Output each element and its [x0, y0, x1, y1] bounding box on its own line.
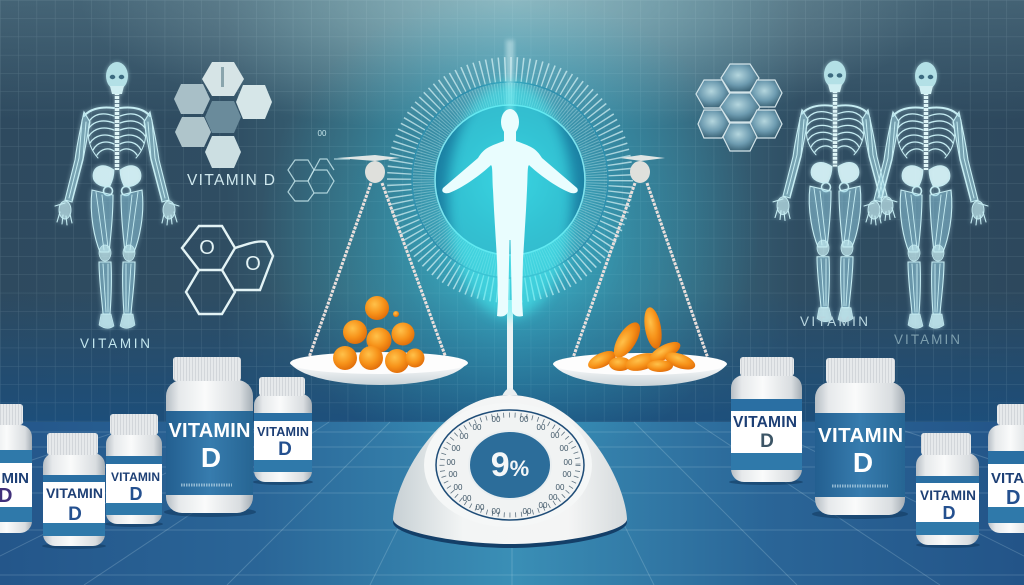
- background wall: [0, 0, 1024, 425]
- dial tick numbers: 00: [476, 503, 485, 512]
- vertical light beam and scale pole: [502, 40, 518, 396]
- small molecule diagram: [288, 129, 350, 201]
- right pan with softgel capsules: [553, 306, 727, 386]
- bottle: far left, cropped: [0, 404, 32, 533]
- orange capsules: [585, 306, 697, 374]
- dial tick numbers: 00: [460, 432, 469, 441]
- dial tick numbers: 00: [551, 431, 560, 440]
- dial tick numbers: 00: [523, 507, 532, 516]
- dial tick numbers: 00: [463, 494, 472, 503]
- dial tick numbers: 00: [520, 415, 529, 424]
- bottle: large left: D: [201, 442, 221, 473]
- bottle: small middle left: [105, 414, 163, 527]
- orange balls: [333, 296, 424, 373]
- dial tick numbers: 00: [549, 493, 558, 502]
- dial tick numbers: 00: [556, 483, 565, 492]
- bottle: back left: D: [278, 439, 292, 460]
- bottle: small front left: [42, 433, 106, 549]
- label: vitamin D: VITAMIN D: [187, 172, 275, 189]
- glowing human figure: [442, 82, 578, 318]
- percentage value: 9%: [491, 446, 529, 484]
- label text: VITAMIN: [168, 420, 250, 442]
- dial tick numbers: [447, 415, 573, 516]
- dial tick numbers: 00: [539, 501, 548, 510]
- bottle: back left: [253, 377, 313, 485]
- bottle: back right: D: [760, 431, 774, 452]
- label text: MIN: [2, 470, 29, 487]
- right scale arm: [568, 155, 712, 372]
- label text: VITAMIN: [818, 424, 903, 447]
- dial tick numbers: 00: [447, 458, 456, 467]
- dial tick numbers: 00: [492, 507, 501, 516]
- dial tick numbers: 00: [560, 444, 569, 453]
- left chains: [306, 183, 450, 369]
- dial tick numbers: 00: [473, 423, 482, 432]
- inner disc: [435, 105, 585, 255]
- dial tick numbers: 00: [563, 470, 572, 479]
- hexagon cluster: right: [696, 64, 782, 151]
- label text: VITAMIN: [46, 485, 103, 501]
- small molecule diagram: 00: [318, 129, 327, 138]
- dial tick numbers: 00: [537, 423, 546, 432]
- dial tick numbers: 00: [492, 415, 501, 424]
- skeletons: right pair: [773, 61, 988, 347]
- dial centre readout: [469, 431, 551, 499]
- radial sunburst ring: [400, 70, 620, 290]
- label text: VITAMIN: [257, 425, 309, 439]
- dial tick numbers: 00: [452, 444, 461, 453]
- bottle: back right: [729, 357, 803, 485]
- bottle: small front right: [916, 433, 980, 548]
- bottle: small front right: D: [942, 503, 956, 523]
- label text: VITA: [991, 470, 1024, 487]
- left pan with softgel balls: [290, 296, 468, 385]
- bottle: large right: [812, 358, 908, 519]
- hexagon cluster: vitamin D: [174, 62, 275, 189]
- bottle: small front left: D: [68, 504, 82, 525]
- dial scale base: [393, 395, 627, 548]
- label: vitamin under left skeleton: VITAMIN: [80, 336, 150, 351]
- dial tick numbers: 00: [449, 470, 458, 479]
- left scale arm: [306, 155, 450, 369]
- label text: VITAMIN: [920, 488, 976, 503]
- bottle: small middle left: D: [130, 484, 142, 504]
- chemical structure: O: [245, 253, 261, 275]
- central glow: [260, 0, 760, 470]
- chemical structure: [182, 226, 273, 314]
- bottle: large left: [164, 357, 256, 517]
- skeleton: left: [55, 62, 179, 351]
- label text: VITAMIN: [111, 470, 160, 484]
- dial tick numbers: 00: [564, 458, 573, 467]
- label: vitamin far right: VITAMIN: [894, 332, 960, 347]
- label: vitamin right: VITAMIN: [800, 314, 868, 329]
- bottle: far right, cropped: [988, 404, 1024, 533]
- background floor: [0, 422, 1024, 585]
- right chains: [568, 183, 712, 372]
- label text: VITAMIN: [733, 414, 797, 431]
- dial face: [424, 403, 592, 527]
- bottle: far right, cropped: D: [1006, 487, 1020, 509]
- bottle: large right: D: [853, 447, 873, 478]
- chemical structure: O: [199, 237, 215, 259]
- dial tick numbers: 00: [454, 483, 463, 492]
